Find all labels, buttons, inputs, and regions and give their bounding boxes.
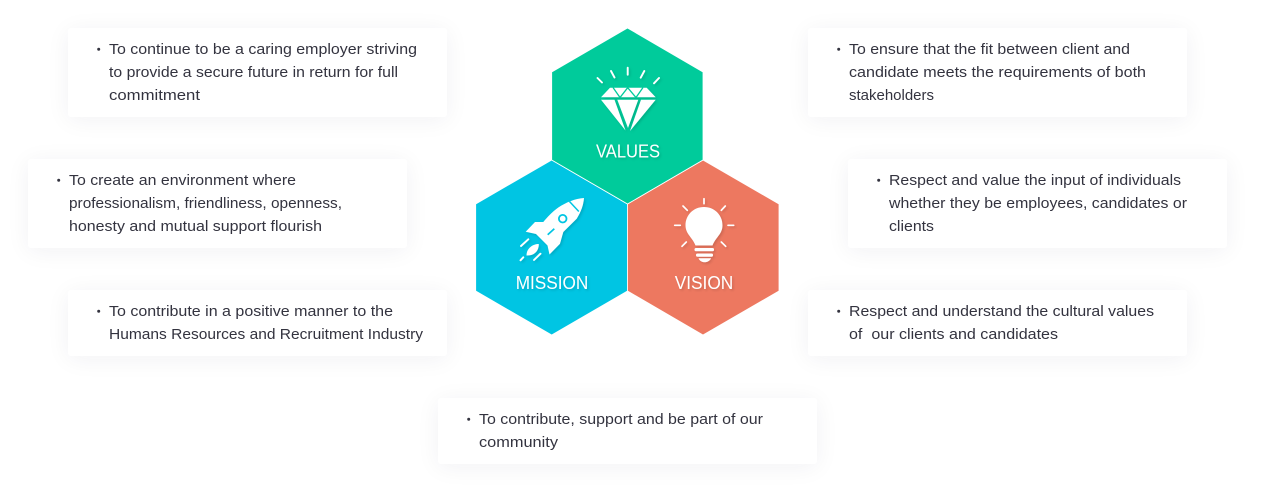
label: vision: VISION (675, 273, 733, 293)
panel: caring employer statement: To continue to be a caring employer striving (109, 41, 417, 58)
panel: respect individuals statement: whether they be employees, candidates or (888, 195, 1187, 212)
icon: light bulb (675, 199, 734, 262)
panel: environment statement: To create an environment where (69, 172, 296, 189)
panel: environment statement: honesty and mutual support flourish (69, 218, 322, 235)
panel: industry contribution statement: Humans Resources and Recruitment Industry (109, 326, 424, 343)
panel: industry contribution statement: To contribute in a positive manner to the (109, 303, 393, 320)
panel: cultural values statement: Respect and understand the cultural values (849, 303, 1154, 320)
panel: community statement: To contribute, support and be part of our (479, 411, 763, 428)
panel: client and candidate fit statement (808, 28, 1187, 117)
panel: industry contribution statement (68, 290, 447, 356)
label: mission: MISSION (516, 273, 588, 293)
panel: environment statement (28, 159, 407, 248)
panel: caring employer statement: to provide a secure future in return for full (109, 64, 398, 81)
panel: cultural values statement (808, 290, 1187, 356)
icon: rocket (520, 198, 584, 260)
panel: cultural values statement: of our clients and candidates (849, 326, 1058, 343)
panel: caring employer statement (68, 28, 447, 117)
hexagon: values (552, 28, 703, 204)
panel: respect individuals statement: clients (889, 218, 934, 235)
panel: client and candidate fit statement: To ensure that the fit between client and (849, 41, 1130, 58)
panel: respect individuals statement: Respect and value the input of individuals (889, 172, 1181, 189)
panel: respect individuals statement (848, 159, 1227, 248)
hexagon: vision (628, 160, 779, 335)
panel: client and candidate fit statement: candidate meets the requirements of both (849, 64, 1146, 81)
panel: community statement: community (479, 434, 559, 451)
hexagon: mission (476, 160, 628, 335)
label: values: VALUES (596, 142, 660, 162)
panel: environment statement: professionalism, friendliness, openness, (69, 195, 342, 212)
icon: diamond (598, 68, 659, 131)
panel: client and candidate fit statement: stakeholders (849, 87, 934, 104)
panel: caring employer statement: commitment (109, 87, 201, 104)
panel: community statement (438, 398, 817, 464)
